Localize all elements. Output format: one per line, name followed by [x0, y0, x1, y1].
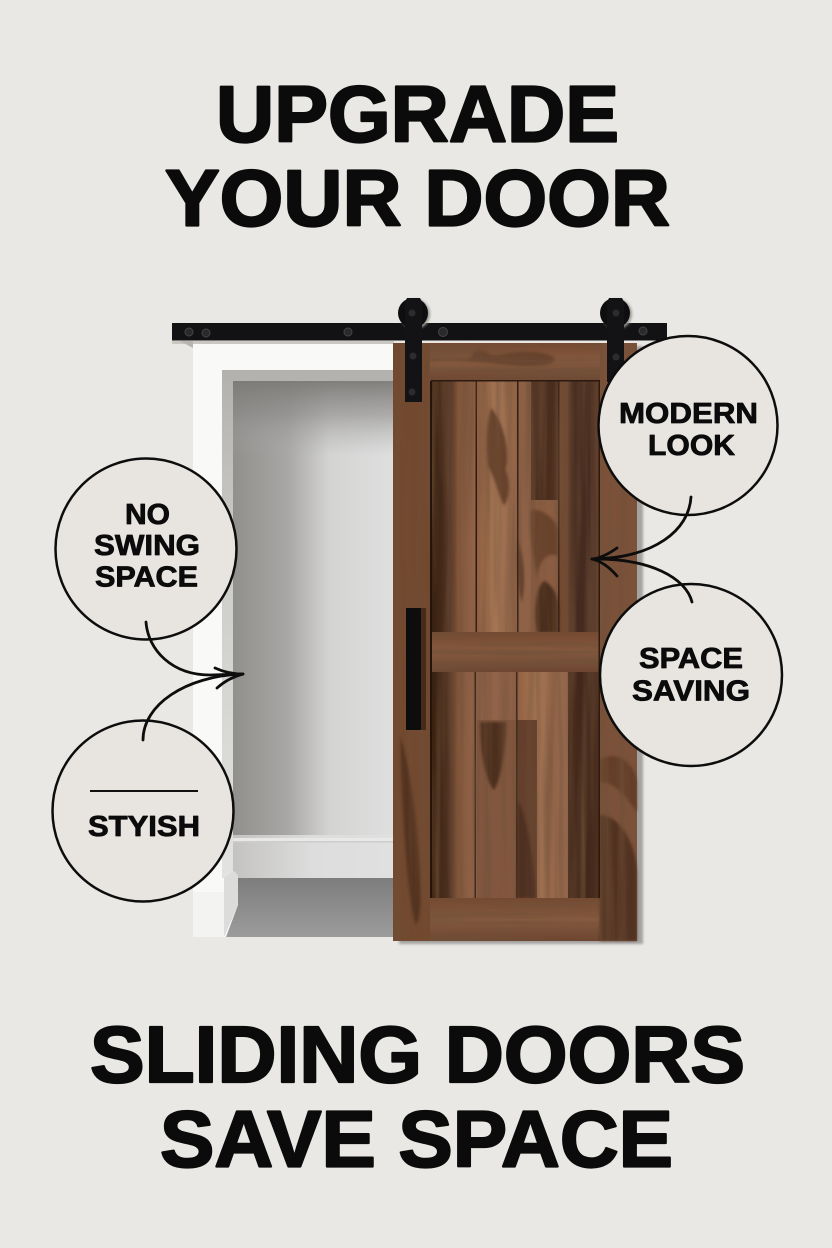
barn door panel: [393, 343, 643, 944]
callout: modern look: MODERN: [619, 398, 758, 430]
title: upgrade your door: YOUR DOOR: [165, 154, 670, 242]
left hanger: [398, 298, 430, 402]
footer heading: sliding doors save space: SLIDING DOORS: [90, 1010, 745, 1099]
door handle: [406, 608, 426, 730]
door scene: [172, 298, 667, 944]
footer heading: sliding doors save space: SAVE SPACE: [160, 1094, 673, 1184]
title: upgrade your door: [165, 70, 670, 242]
wood grain: [393, 343, 430, 941]
arrows: right pair: [592, 497, 692, 602]
callout: space saving: SPACE: [639, 643, 743, 675]
callout: stylish: [52, 720, 234, 902]
callout: stylish: STYISH: [88, 811, 200, 843]
callout: no swing space: NO: [125, 499, 170, 531]
top rail: [430, 343, 600, 381]
arrows: left pair: [143, 622, 243, 740]
callout: no swing space: [56, 458, 236, 640]
left stile: [393, 343, 430, 941]
title: upgrade your door: UPGRADE: [216, 70, 619, 158]
callout: space saving: SAVING: [632, 676, 750, 708]
footer heading: sliding doors save space: [90, 1010, 745, 1184]
callout: no swing space: SPACE: [95, 562, 198, 594]
door frame and opening: [172, 341, 395, 937]
middle rail: [430, 632, 600, 672]
callout: no swing space: SWING: [94, 530, 200, 562]
callout: space saving: [600, 584, 782, 766]
callout: modern look: [598, 336, 778, 515]
sliding track rail: [172, 323, 667, 348]
right hanger: [600, 298, 632, 382]
planks upper: [431, 381, 600, 633]
callout: modern look: LOOK: [648, 430, 735, 462]
right stile: [600, 343, 637, 941]
bottom rail: [430, 898, 600, 941]
planks lower: [431, 672, 600, 898]
